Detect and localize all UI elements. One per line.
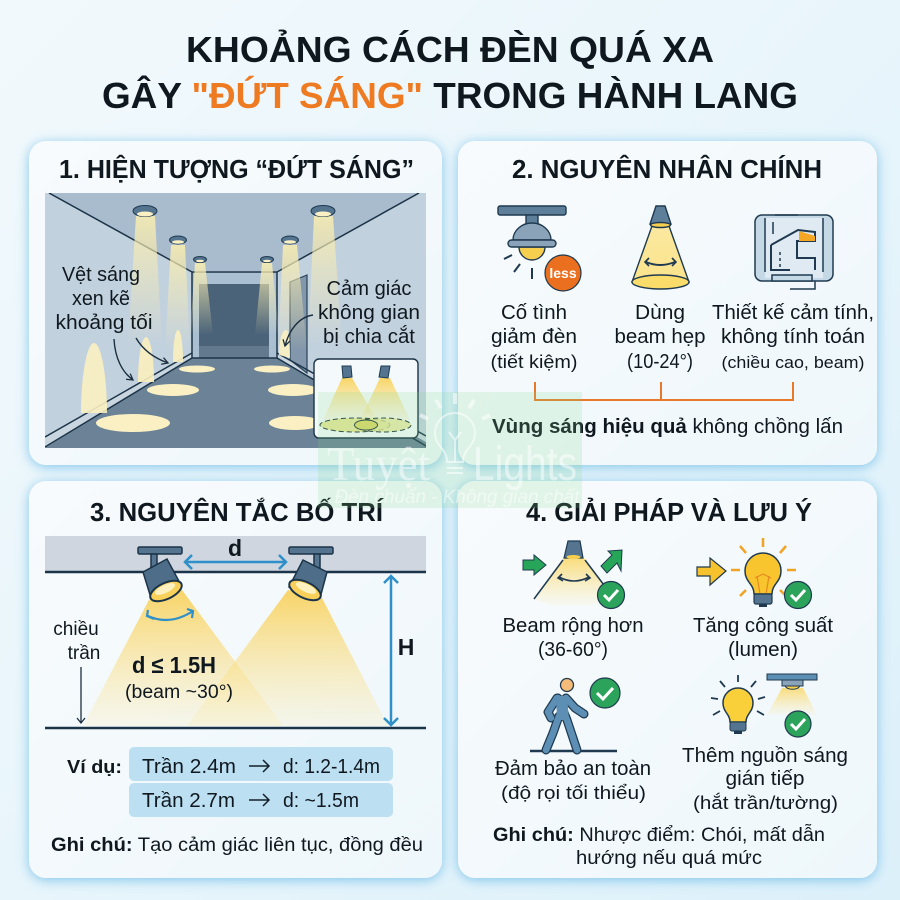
wall light patches [81,330,290,413]
floor light pools [96,366,321,432]
title [102,29,798,116]
example table: d: 1.2-1.4m [283,756,380,778]
track lamp left [138,547,185,605]
text: thêm nguồn sáng gián tiếp: (hắt trần/tường) [693,792,838,813]
label: cảm giác không gian bị chia cắt: bị chia cắt [323,325,415,348]
arrows to wall light patches [114,315,313,380]
example table: Trần 2.7m [142,790,235,812]
note 4: Ghi chú: Nhược điểm: Chói, mất dẫn [493,824,825,846]
text: thêm nguồn sáng gián tiếp [682,745,848,813]
icon: walking person [530,678,620,751]
label: cảm giác không gian bị chia cắt: không gian [318,302,420,324]
title: GÂY "ĐỨT SÁNG" TRONG HÀNH LANG [102,74,798,116]
example table: Trần 2.4m [142,756,236,778]
text: thiết kế cảm tính [712,302,874,372]
note 4: hướng nếu quá mức [576,848,762,869]
text: tăng công suất: Tăng công suất [693,615,833,637]
icon: dimmed track light [498,206,566,279]
label: vệt sáng xen kẽ khoảng tối: xen kẽ [72,288,130,310]
ceiling height arrow [77,667,85,723]
heading 2: 2. NGUYÊN NHÂN CHÍNH [512,154,822,184]
text: cố tình giảm đèn: giảm đèn [491,326,577,348]
corridor illustration [45,193,426,448]
label H: H [398,634,414,660]
text: beam rộng hơn: (36-60°) [538,639,608,661]
watermark: Tuyệt [327,438,431,491]
beam angle arc [147,609,193,620]
inset: beams not overlapping [314,359,418,438]
example table [67,747,393,817]
formula: d ≤ 1.5H [132,652,216,678]
text: cố tình giảm đèn: Cố tình [501,302,567,324]
text: beam rộng hơn: Beam rộng hơn [502,615,644,637]
watermark: Lights [473,438,577,491]
panel: 4. giải pháp và lưu ý [458,481,877,878]
spacing diagram [45,535,426,728]
label d: d [228,535,242,561]
beam note: (beam ~30°) [125,682,233,703]
text: cố tình giảm đèn [490,302,578,372]
label chiều trần: trần [68,643,100,664]
heading 4: 4. GIẢI PHÁP VÀ LƯU Ý [526,497,812,527]
text: thêm nguồn sáng gián tiếp: gián tiếp [726,768,804,790]
text: tăng công suất: (lumen) [728,639,798,661]
text: dùng beam hẹp: beam hẹp [614,326,706,348]
ceiling and wall lines [45,193,426,447]
label: vệt sáng xen kẽ khoảng tối: khoảng tối [56,312,152,334]
icon: narrow beam cone [632,206,689,289]
label: cảm giác không gian bị chia cắt: Cảm giác [326,278,412,300]
text: đảm bảo an toàn: (độ rọi tối thiểu) [501,783,646,803]
text: thêm nguồn sáng gián tiếp: Thêm nguồn sáng [682,745,848,767]
orange bracket [535,382,793,400]
panel: 2. nguyên nhân chính [458,141,877,465]
text: đảm bảo an toàn: Đảm bảo an toàn [495,758,651,780]
text: dùng beam hẹp: (10-24°) [627,351,693,373]
label: cảm giác không gian bị chia cắt [318,278,420,348]
label chiều trần: chiều [53,619,99,640]
conclusion text: Vùng sáng hiệu quả không chồng lấn [492,416,843,438]
ceiling lamps [133,206,335,262]
light beams [128,216,342,350]
text: tăng công suất [693,615,833,661]
text: dùng beam hẹp [614,302,706,373]
light cones [83,590,388,726]
label: vệt sáng xen kẽ khoảng tối [56,264,152,334]
text: thiết kế cảm tính: (chiều cao, beam) [722,353,864,372]
text: thiết kế cảm tính: Thiết kế cảm tính, [712,302,874,324]
icon: brighter bulb [697,538,812,608]
note 3: Ghi chú: Tạo cảm giác liên tục, đồng đều [51,835,423,856]
heading 1: 1. HIỆN TƯỢNG “ĐỨT SÁNG” [59,154,414,184]
icon: indirect light source [711,674,817,737]
icon: less badge [545,255,581,291]
text: beam rộng hơn [502,615,644,661]
icon: wider beam [523,541,624,608]
panel: 3. nguyên tắc bố trí [29,481,442,878]
arrow: distance d [185,555,286,569]
title: KHOẢNG CÁCH ĐÈN QUÁ XA [186,29,714,70]
arrow: height H [384,576,398,725]
watermark [318,392,582,508]
text: dùng beam hẹp: Dùng [635,302,685,324]
label: vệt sáng xen kẽ khoảng tối: Vệt sáng [62,264,140,286]
icon: less badge: less [549,265,577,281]
watermark: Đèn chuẩn - Không gian chất [334,487,580,508]
icon: blueprint [755,215,833,289]
note 4 [493,824,825,869]
label chiều trần [53,619,100,664]
heading 3: 3. NGUYÊN TẮC BỐ TRÍ [90,497,384,527]
example table: Ví dụ: [67,757,122,777]
track lamp right [286,547,333,604]
text: đảm bảo an toàn [495,758,651,803]
panel: 1. hiện tượng đứt sáng [29,141,442,465]
text: thiết kế cảm tính: không tính toán [721,326,865,348]
text: cố tình giảm đèn: (tiết kiệm) [490,352,578,372]
example table: d: ~1.5m [283,790,359,812]
